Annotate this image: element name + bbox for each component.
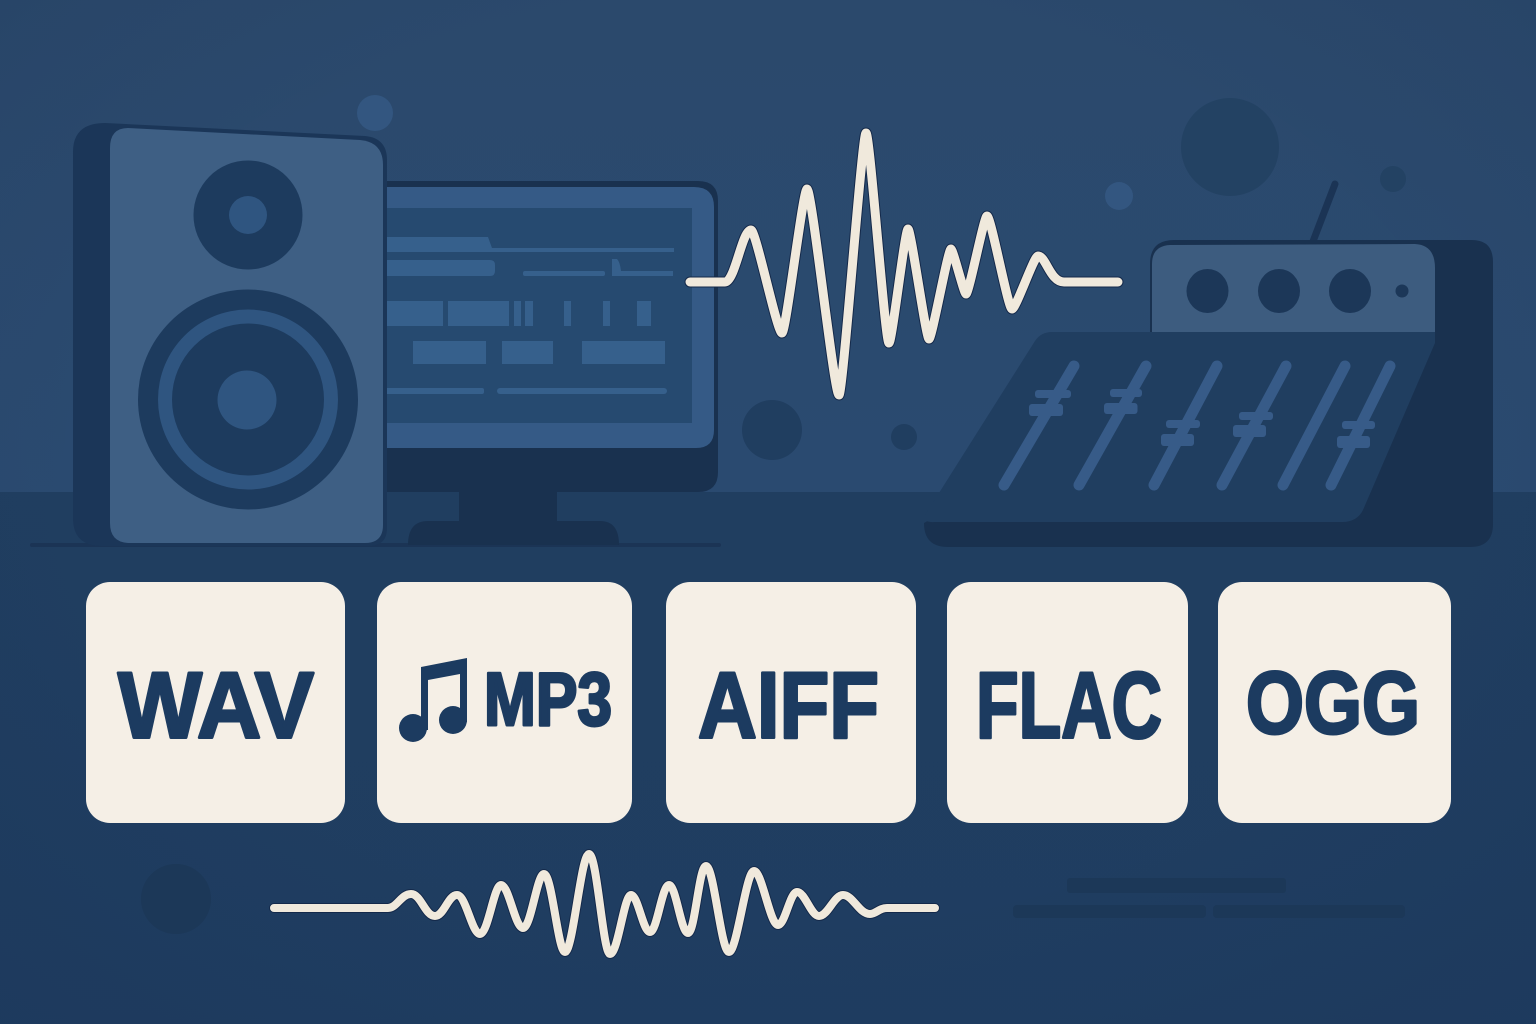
decorative background circles [141, 95, 1406, 934]
speaker [73, 123, 387, 546]
amp panel [1152, 244, 1435, 334]
speaker front [110, 128, 383, 543]
amp knobs [1186, 269, 1408, 313]
editor tracks [370, 237, 674, 394]
monitor stand [408, 485, 619, 545]
monitor back shadow [370, 181, 718, 492]
background wall [0, 0, 1536, 492]
format card: AIFF [666, 582, 916, 823]
floor band [0, 492, 1536, 1024]
format card: WAV [86, 582, 345, 823]
placeholder text bars [1013, 878, 1405, 918]
icon: music note [399, 658, 467, 742]
tweeter [194, 160, 302, 270]
format card: OGG: OGG [1246, 653, 1420, 752]
monitor bezel [370, 187, 714, 448]
antenna [1312, 184, 1335, 244]
fader caps [1029, 389, 1375, 448]
format card: OGG [1218, 582, 1451, 823]
speaker cabinet side [73, 123, 387, 546]
format card: MP3: MP3 [484, 657, 612, 741]
waveform: upper [690, 133, 1118, 395]
mixer top panel [925, 332, 1435, 522]
format card: FLAC: FLAC [976, 652, 1162, 758]
woofer [138, 290, 358, 510]
format card: FLAC [947, 582, 1188, 823]
monitor screen [370, 208, 692, 423]
mixer rear body [924, 240, 1493, 547]
ground line [30, 543, 721, 547]
format card: WAV: WAV [118, 652, 314, 758]
format card: AIFF: AIFF [698, 652, 879, 758]
waveform: lower [274, 854, 935, 954]
faders [1004, 366, 1390, 485]
monitor with audio editor [370, 181, 718, 545]
mixer and amp [924, 184, 1493, 547]
format card: MP3 [377, 582, 632, 823]
